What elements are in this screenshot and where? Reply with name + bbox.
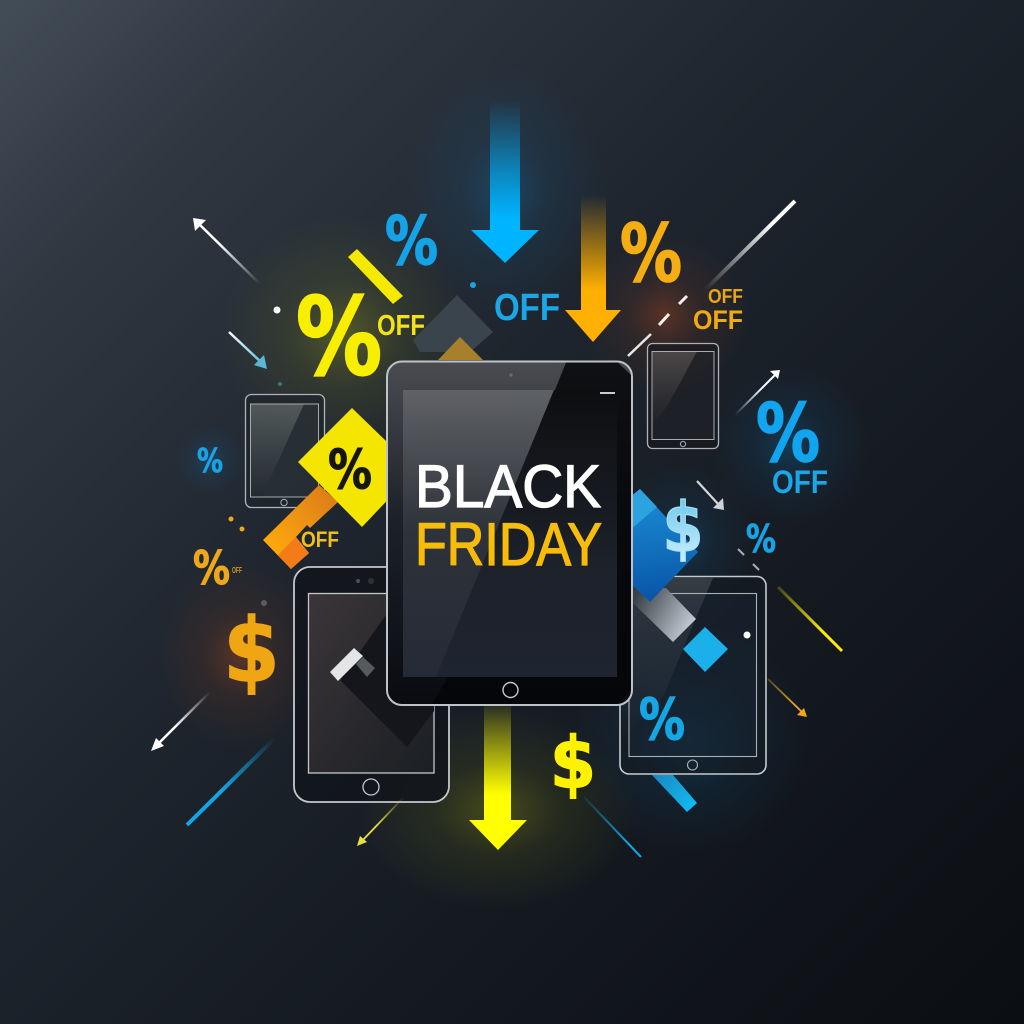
screen shade top right bbox=[484, 390, 617, 560]
white dot on right tablet bbox=[744, 632, 750, 638]
blue diamond on right tablet bbox=[683, 627, 728, 672]
dark bezel right side bbox=[432, 362, 631, 704]
orange dollar sign: $ bbox=[224, 599, 280, 702]
light blue dollar sign: $ bbox=[662, 488, 704, 568]
icon: white arrow top left bbox=[193, 218, 260, 284]
orange OFF labels: OFF bbox=[708, 286, 743, 308]
home button bbox=[363, 779, 379, 795]
orange bar bbox=[263, 485, 338, 569]
yellow OFF label: OFF bbox=[377, 310, 425, 342]
blue percent small right: % bbox=[746, 517, 776, 561]
heading: FRIDAY: FRIDAY bbox=[415, 511, 602, 578]
orange dots bbox=[228, 516, 244, 532]
orange OFF labels bbox=[693, 286, 743, 335]
icon: orange down arrow bbox=[565, 195, 621, 342]
tablet outline: left top bbox=[246, 394, 324, 508]
yellow diamond with percent: % bbox=[328, 438, 372, 501]
yellow slanted bar bbox=[348, 249, 403, 304]
main tablet bbox=[387, 362, 632, 705]
blue percent right with OFF: % bbox=[756, 387, 820, 480]
yellow OFF on orange bar: OFF bbox=[301, 527, 339, 552]
yellow percent large: % bbox=[296, 276, 382, 400]
blue diamond beside main tablet bbox=[630, 489, 698, 602]
icon: white-blue arrow bbox=[229, 332, 267, 369]
orange OFF labels: OFF bbox=[693, 305, 743, 335]
heading: BLACK: BLACK bbox=[415, 453, 601, 520]
icon: grey arrow bbox=[697, 481, 724, 510]
white line and dashes, top right bbox=[628, 201, 795, 356]
screen bbox=[403, 390, 617, 677]
icon: white arrow right bbox=[735, 370, 780, 415]
icon: white arrow bottom left bbox=[151, 692, 210, 751]
icon: yellow down arrow bbox=[469, 704, 527, 850]
blue percent right with OFF: OFF bbox=[772, 464, 828, 500]
tablet outline: top right bbox=[648, 344, 718, 448]
grey gradient bar on right tablet bbox=[630, 588, 696, 642]
white bar bbox=[330, 648, 363, 681]
colored glows bbox=[155, 65, 870, 910]
icon: blue down arrow bbox=[471, 100, 539, 263]
yellow dollar sign: $ bbox=[550, 722, 596, 805]
grey bar bbox=[356, 657, 375, 677]
tablet outline: bottom right bbox=[620, 576, 766, 774]
tablet outline: bottom left bbox=[294, 567, 450, 802]
blue line bottom bbox=[584, 797, 641, 857]
small blue dots bbox=[278, 282, 476, 386]
blue percent on right tablet: % bbox=[639, 687, 685, 753]
screen glare bbox=[403, 390, 554, 677]
blue bar below right tablet bbox=[652, 775, 697, 812]
orange percent with tiny OFF: OFF bbox=[232, 566, 242, 575]
blue percent far left: % bbox=[197, 441, 223, 480]
icon: orange arrow bbox=[768, 679, 807, 717]
yellow diamond with percent bbox=[298, 408, 416, 527]
orange percent top: % bbox=[620, 208, 682, 300]
blue OFF label: OFF bbox=[494, 287, 560, 329]
yellow line right bbox=[778, 587, 842, 651]
small dashes bbox=[738, 549, 759, 570]
white dot bbox=[274, 306, 280, 314]
icon: yellow arrow bbox=[357, 797, 404, 846]
decorative top diamonds bbox=[413, 295, 493, 360]
camera dot bbox=[509, 373, 513, 377]
status bar bbox=[600, 392, 615, 394]
home button bbox=[503, 682, 518, 698]
orange percent with tiny OFF: % bbox=[193, 541, 230, 595]
dark diamond inside tablet bbox=[340, 615, 434, 746]
blue line bottom left bbox=[187, 738, 275, 825]
blue percent top: % bbox=[385, 202, 438, 280]
grey dot bbox=[261, 600, 267, 606]
